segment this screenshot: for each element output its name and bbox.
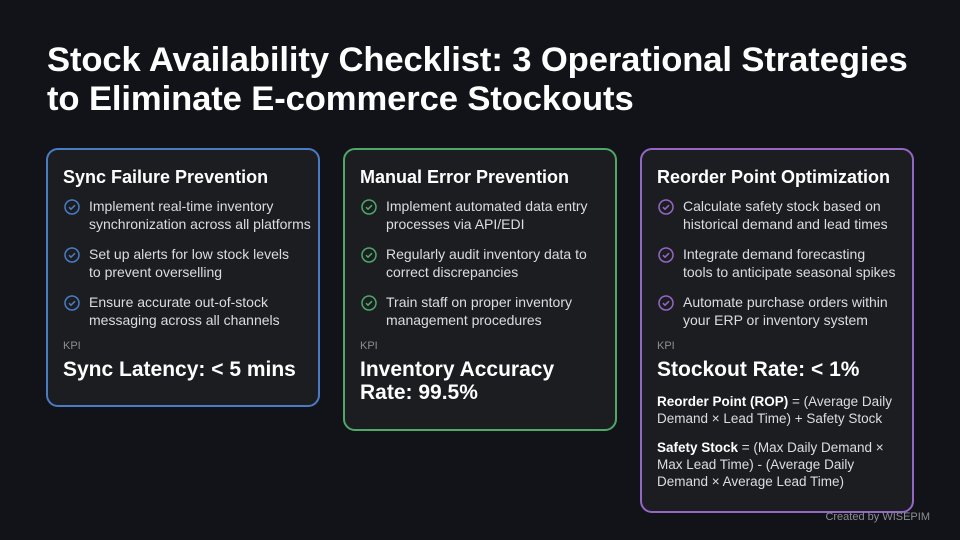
- bullet 1: synchronization across all platforms: [89, 216, 311, 232]
- formula: safety stock: Max Lead Time) - (Average Daily: [657, 457, 854, 472]
- bullet 1: historical demand and lead times: [683, 216, 888, 232]
- bullet 2: tools to anticipate seasonal spikes: [683, 264, 895, 280]
- bullet 3: management procedures: [386, 312, 542, 328]
- bullet 1: processes via API/EDI: [386, 216, 525, 232]
- bullet 3: Automate purchase orders within: [683, 294, 888, 310]
- formula: safety stock: Safety Stock = (Max Daily Demand ×: [657, 440, 884, 455]
- credit: Created by WISEPIM: [825, 511, 930, 523]
- bullet 1: [658, 198, 888, 232]
- heading: Sync Failure Prevention: [63, 167, 268, 187]
- bullet 3: Ensure accurate out-of-stock: [89, 294, 268, 310]
- formula: safety stock: Demand × Average Lead Time): [657, 474, 844, 489]
- title: Stock Availability Checklist: 3 Operational Strategies: [47, 41, 908, 79]
- bullet 1: Calculate safety stock based on: [683, 198, 881, 214]
- panel: sync failure prevention: [46, 148, 320, 407]
- panel: reorder point optimization: [640, 148, 914, 513]
- bullet 3: Train staff on proper inventory: [386, 294, 572, 310]
- kpi label: KPI: [360, 340, 378, 352]
- kpi value: Sync Latency: < 5 mins: [63, 358, 296, 381]
- bullet 3: [658, 294, 888, 328]
- formula: ROP: Demand × Lead Time) + Safety Stock: [657, 411, 882, 426]
- kpi value: [360, 358, 554, 404]
- bullet 1: Implement real-time inventory: [89, 198, 273, 214]
- heading: Reorder Point Optimization: [657, 167, 890, 187]
- bullet 2: [64, 246, 289, 280]
- bullet 2: [658, 246, 895, 280]
- bullet 2: [361, 246, 587, 280]
- bullet 2: Regularly audit inventory data to: [386, 246, 587, 262]
- kpi label: KPI: [63, 340, 81, 352]
- bullet 1: Implement automated data entry: [386, 198, 588, 214]
- bullet 2: Set up alerts for low stock levels: [89, 246, 289, 262]
- bullet 1: [64, 198, 311, 232]
- bullet 3: messaging across all channels: [89, 312, 280, 328]
- kpi value: Stockout Rate: < 1%: [657, 358, 859, 381]
- panel: manual error prevention: [343, 148, 617, 431]
- kpi value: Inventory Accuracy: [360, 358, 554, 381]
- bullet 2: Integrate demand forecasting: [683, 246, 865, 262]
- bullet 2: correct discrepancies: [386, 264, 518, 280]
- formula: safety stock: [657, 440, 884, 489]
- heading: Manual Error Prevention: [360, 167, 569, 187]
- bullet 3: your ERP or inventory system: [683, 312, 868, 328]
- kpi value: Rate: 99.5%: [360, 381, 478, 404]
- formula: ROP: Reorder Point (ROP) = (Average Daily: [657, 394, 892, 409]
- bullet 3: [64, 294, 280, 328]
- bullet 3: [361, 294, 572, 328]
- title: to Eliminate E-commerce Stockouts: [47, 80, 634, 118]
- title: [47, 41, 908, 118]
- bullet 2: to prevent overselling: [89, 264, 222, 280]
- kpi label: KPI: [657, 340, 675, 352]
- formula: ROP: [657, 394, 892, 426]
- bullet 1: [361, 198, 588, 232]
